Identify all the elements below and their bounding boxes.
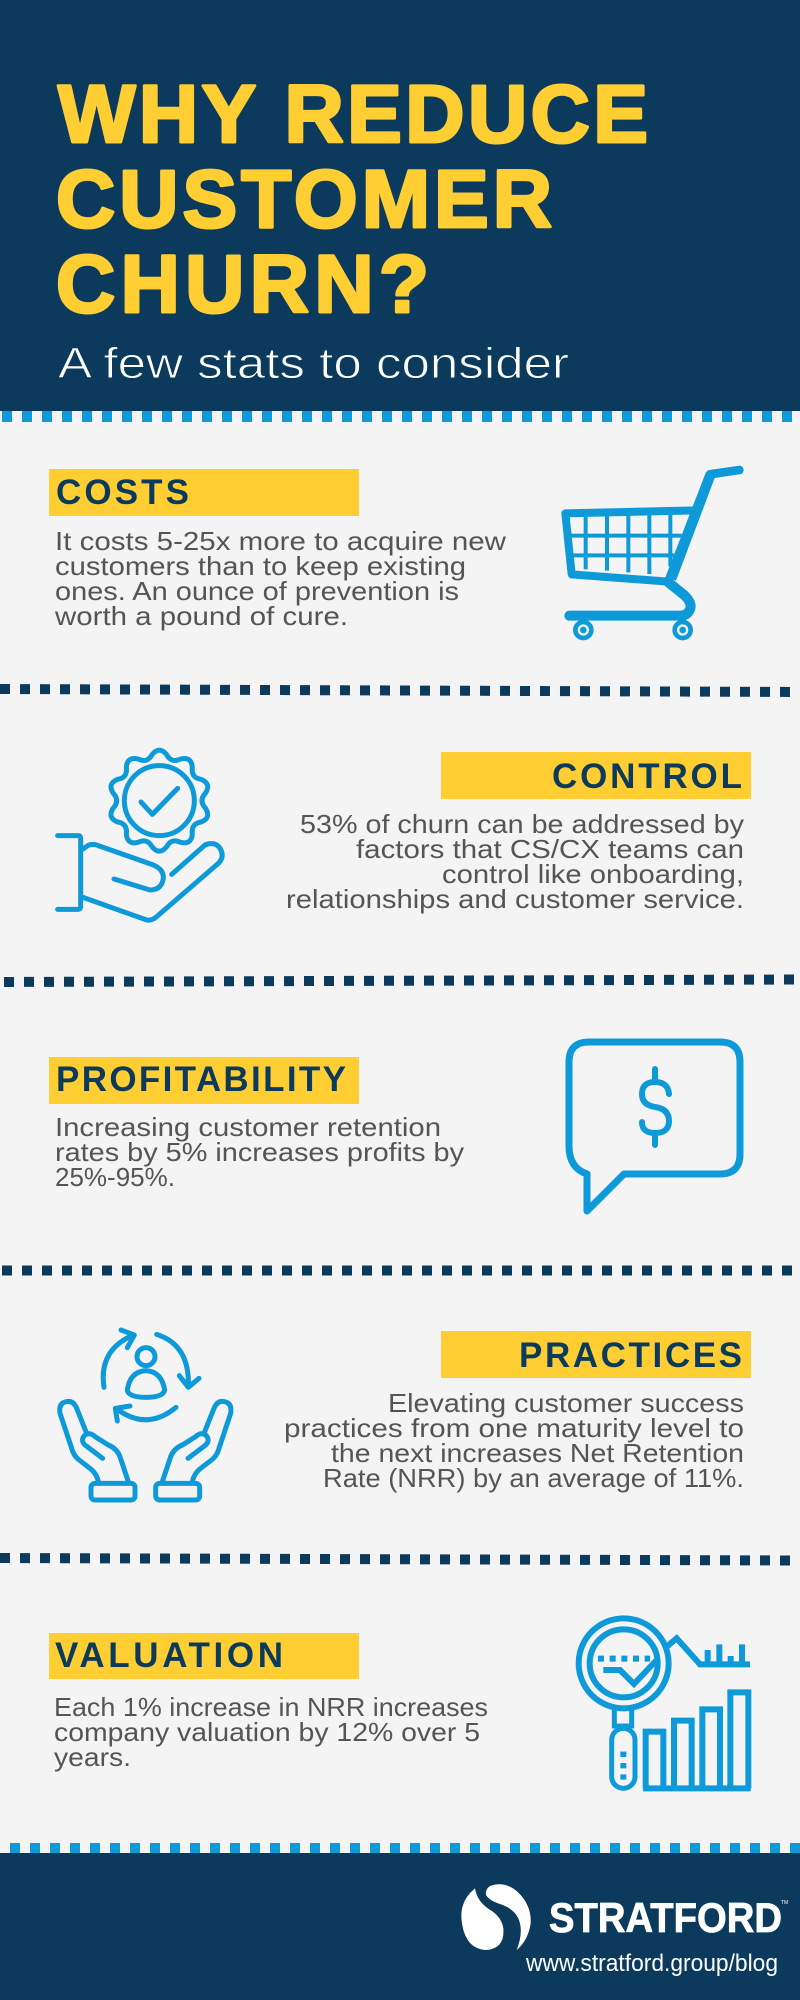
heading: costs (49, 469, 359, 516)
panel: practices (60, 1330, 751, 1500)
icon: speech bubble with dollar (569, 1042, 740, 1211)
text: valuation: Each 1% increase in NRR increases (54, 1692, 488, 1722)
header band (0, 0, 800, 411)
text: practices: Rate (NRR) by an average of 11%. (323, 1463, 744, 1493)
text: costs: worth a pound of cure. (54, 601, 348, 631)
icon: hand with badge (58, 750, 222, 920)
panel: profitability (49, 1042, 740, 1211)
logo: stratford mark (461, 1884, 531, 1950)
heading: practices (441, 1331, 751, 1378)
text: valuation: company valuation by 12% over 5 (54, 1717, 480, 1747)
footer url: www.stratford.group/blog (525, 1950, 778, 1977)
text: control: 53% of churn can be addressed by (300, 809, 744, 839)
text: practices (284, 1388, 744, 1493)
text: control: control like onboarding, (442, 859, 744, 889)
trademark mark: TM (781, 1900, 788, 1906)
text: profitability: Increasing customer retention (55, 1112, 441, 1142)
footer band (0, 1853, 800, 2000)
text: practices: practices from one maturity level to (284, 1413, 744, 1443)
text: costs (54, 526, 506, 631)
text: control: factors that CS/CX teams can (356, 834, 744, 864)
text: profitability: 25%-95%. (55, 1162, 175, 1192)
panel: costs (49, 469, 739, 638)
text: control: relationships and customer service. (286, 884, 744, 914)
text: practices: the next increases Net Retention (331, 1438, 744, 1468)
title (56, 69, 648, 330)
icon: magnifier and bar chart (579, 1618, 751, 1788)
title: WHY REDUCE (58, 69, 648, 160)
heading: practices: PRACTICES (519, 1336, 742, 1375)
text: costs: It costs 5-25x more to acquire new (55, 526, 506, 556)
heading: valuation (49, 1633, 359, 1679)
text: valuation (54, 1692, 488, 1772)
panel: control (58, 750, 751, 920)
subtitle: A few stats to consider (58, 339, 569, 388)
heading: control (441, 752, 751, 799)
logo: stratford wordmark: STRATFORD (549, 1894, 782, 1941)
heading: control: CONTROL (552, 757, 742, 796)
text: practices: Elevating customer success (388, 1388, 744, 1418)
text: profitability: rates by 5% increases profits by (55, 1137, 464, 1167)
text: costs: customers than to keep existing (55, 551, 466, 581)
text: profitability (55, 1112, 464, 1192)
text: control (286, 809, 744, 914)
panel: valuation (49, 1618, 751, 1788)
title: CHURN? (56, 239, 429, 330)
text: costs: ones. An ounce of prevention is (55, 576, 459, 606)
heading: profitability: PROFITABILITY (56, 1060, 346, 1099)
title: CUSTOMER (56, 154, 552, 245)
text: valuation: years. (54, 1742, 131, 1772)
heading: costs: COSTS (56, 473, 189, 512)
heading: valuation: VALUATION (55, 1636, 283, 1675)
icon: hands with person and cycle arrows (60, 1330, 231, 1500)
icon: shopping cart (565, 470, 739, 638)
